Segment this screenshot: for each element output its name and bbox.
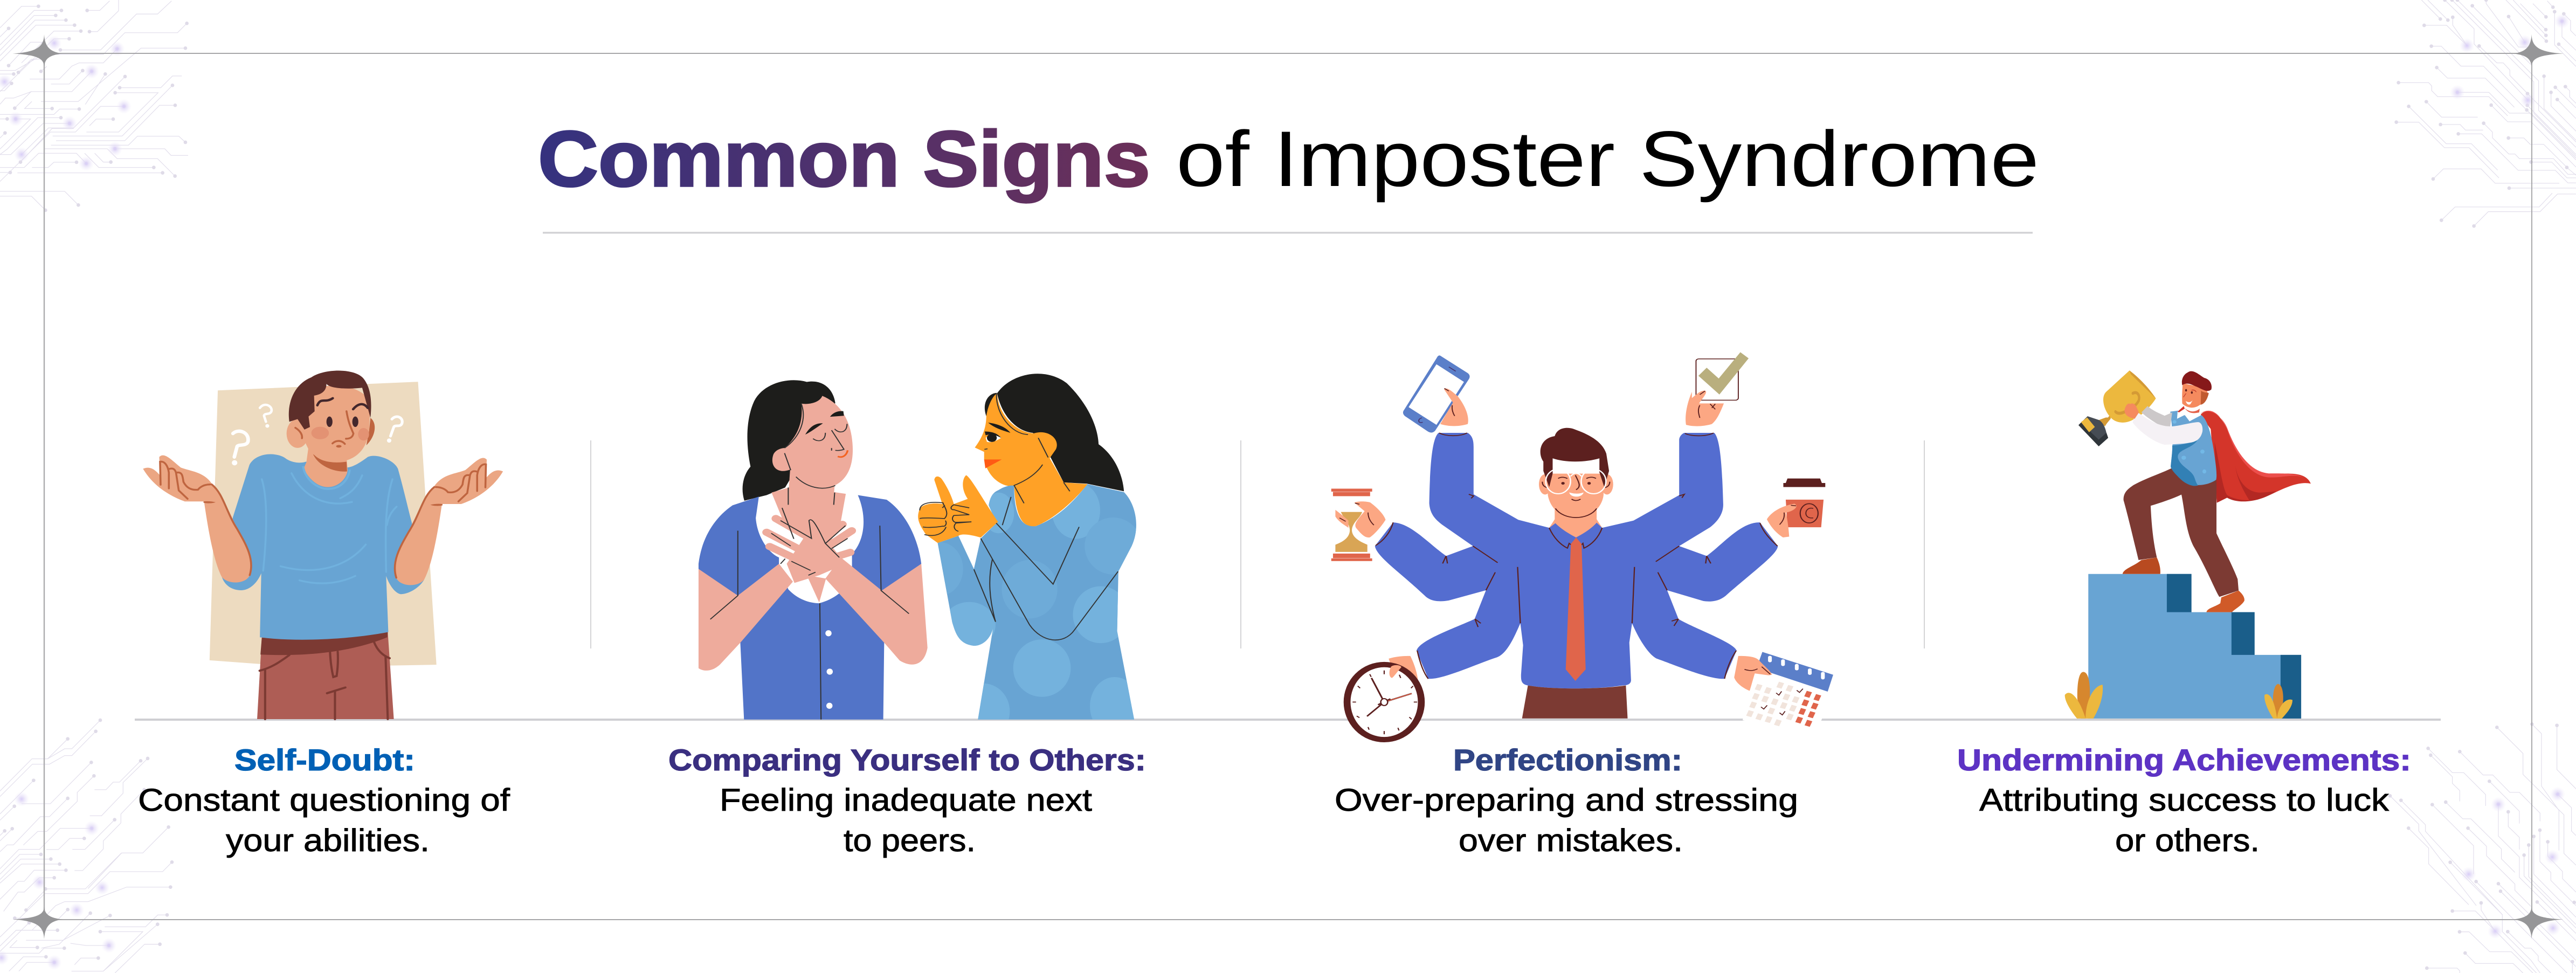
frame corner star: bottom-left xyxy=(12,907,63,939)
frame corner star: top-right xyxy=(2513,34,2564,66)
plant left xyxy=(2077,672,2090,719)
frame corner star: top-left xyxy=(12,34,63,66)
illustration: man shrugging xyxy=(143,371,503,719)
shoes xyxy=(2123,557,2160,574)
hand xyxy=(2124,403,2139,419)
circuit glow spots: top-left xyxy=(0,36,132,171)
illustration: superhero climbing steps with trophy xyxy=(2065,370,2311,719)
caption: Perfectionism: Over-preparing and stressing xyxy=(1335,783,1798,818)
caption: Undermining Achievements: or others. xyxy=(2115,823,2260,858)
circuit glow spots: bottom-right xyxy=(2461,786,2565,939)
caption: Comparing Yourself to Others: Feeling inadequate next xyxy=(720,783,1092,818)
tie xyxy=(1566,537,1586,681)
frame corner star: bottom-right xyxy=(2513,907,2564,939)
head and neck xyxy=(1549,500,1602,537)
shirt and arms xyxy=(1375,433,1778,688)
caption: Comparing Yourself to Others: to peers. xyxy=(844,823,976,858)
caption: Perfectionism: over mistakes. xyxy=(1459,823,1683,858)
head xyxy=(2182,383,2207,408)
title: of Imposter Syndrome xyxy=(1176,115,2039,203)
column divider 1 xyxy=(590,440,591,648)
collar and neck xyxy=(2177,406,2201,422)
circuit glow spots: top-right xyxy=(2450,13,2570,108)
steps xyxy=(2088,574,2301,719)
column divider 2 xyxy=(1240,440,1241,648)
clock xyxy=(1389,656,1418,683)
illustration: multitasking man with six arms xyxy=(1331,352,1833,740)
circuit pattern: bottom-left corner xyxy=(0,720,172,973)
near arm xyxy=(2133,413,2202,445)
circuit glow spots: bottom-left xyxy=(0,791,116,970)
cape xyxy=(2200,411,2311,503)
caption: Self-Doubt: your abilities. xyxy=(226,823,430,858)
plant right xyxy=(2273,684,2283,719)
caption: Undermining Achievements: Attributing success to luck xyxy=(1979,783,2389,818)
caption: Undermining Achievements xyxy=(1957,743,2411,858)
caption: Comparing Yourself to Others: Comparing Yourself to Others: xyxy=(668,743,1146,777)
vest xyxy=(2170,411,2216,485)
caption: Perfectionism: Perfectionism: xyxy=(1453,743,1682,777)
trophy xyxy=(2099,418,2111,426)
caption: Self-Doubt: Self-Doubt: xyxy=(234,743,415,777)
title xyxy=(538,115,2039,203)
circuit pattern: top-left corner xyxy=(0,0,188,210)
caption: Comparing Yourself to Others xyxy=(668,743,1146,858)
checkbox xyxy=(1696,359,1738,400)
hourglass xyxy=(1331,489,1372,492)
calendar xyxy=(1743,663,1833,728)
far arm xyxy=(2142,406,2172,426)
pants xyxy=(2124,468,2239,597)
illustration: two women comparing xyxy=(699,374,1142,740)
phone xyxy=(1403,355,1470,433)
title underline xyxy=(543,232,2033,234)
column divider 3 xyxy=(1924,440,1925,648)
caption: Undermining Achievements: Undermining Achievements: xyxy=(1957,743,2411,777)
ground line xyxy=(135,719,2441,721)
caption: Self-Doubt xyxy=(138,743,510,858)
caption: Self-Doubt: Constant questioning of xyxy=(138,783,510,818)
circuit pattern: bottom-right corner xyxy=(2390,724,2576,973)
title: Common Signs xyxy=(538,115,1150,203)
caption: Perfectionism xyxy=(1335,743,1798,858)
circuit pattern: top-right corner xyxy=(2397,0,2576,226)
coffee cup xyxy=(1783,479,1825,487)
